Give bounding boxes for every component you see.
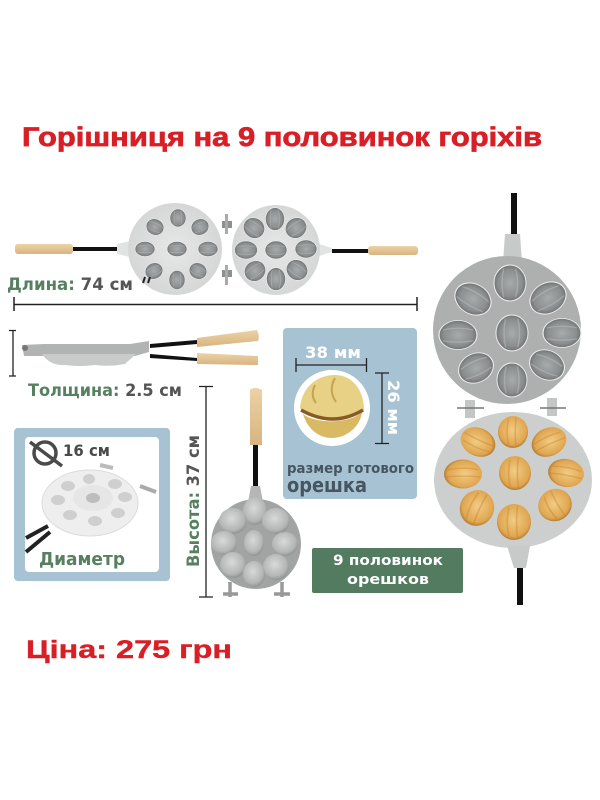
callout: 9 halves: 9 половинок [333, 553, 443, 569]
height dimension line [199, 386, 213, 597]
thickness label: Толщина: 2.5 см [28, 381, 182, 400]
icon: finished nut [294, 370, 370, 446]
length dimension line [14, 297, 417, 311]
icon: diameter symbol [30, 442, 62, 466]
product: open pan top view [15, 203, 418, 295]
nut width label: 38 мм [305, 343, 361, 362]
diameter caption: Диаметр [39, 549, 125, 570]
panel: nut size [283, 328, 417, 499]
nut height line [375, 373, 389, 444]
callout: 9 halves [312, 548, 463, 593]
product: pan back view [211, 388, 301, 597]
height label: Высота: 37 см [184, 435, 203, 567]
product: large open pan with nuts [433, 193, 592, 605]
panel: diameter [14, 428, 170, 581]
callout: 9 halves: орешков [347, 572, 429, 588]
panel: nut size: орешка [287, 473, 367, 497]
nut caption: размер готового [287, 461, 414, 477]
length label: Длина: 74 см [7, 275, 133, 294]
thickness dimension line [9, 330, 16, 376]
diameter value: 16 см [63, 441, 110, 460]
product: pan side view [22, 330, 259, 366]
nut height label: 26 мм [384, 380, 403, 435]
nut width line [296, 358, 366, 372]
price: Ціна: 275 грн [26, 636, 232, 664]
title: Горішниця на 9 половинок горіхів [22, 122, 542, 152]
product: pan angled view [26, 465, 156, 552]
